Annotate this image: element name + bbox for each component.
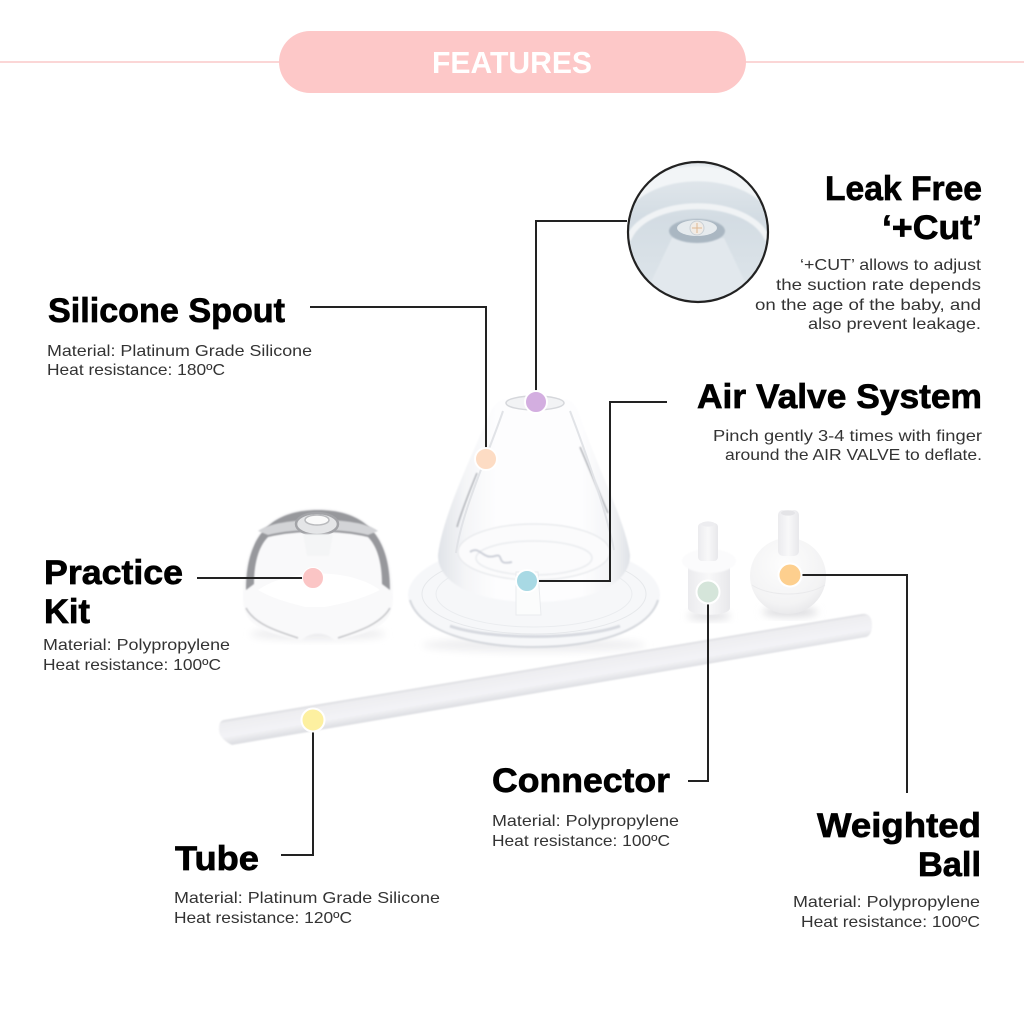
label: connector: Heat resistance: 100ºC [492,833,670,850]
label: leak free +cut: ‘+CUT’ allows to adjust [800,257,982,274]
label: leak free +cut: the suction rate depends [776,277,981,294]
label: air valve system: Pinch gently 3-4 times with finger [713,428,983,445]
marker: air valve [516,570,538,592]
label: weighted ball: Heat resistance: 100ºC [801,914,980,931]
inset: +cut close-up lens [625,162,772,305]
label: weighted ball: Weighted [817,807,981,845]
callout lines [197,221,907,855]
product: connector [682,521,736,620]
label: leak free +cut: Leak Free [825,170,982,208]
label: leak free +cut: on the age of the baby, and [755,297,981,314]
label: silicone spout: Material: Platinum Grade Silicone [47,343,312,360]
marker: practice kit [302,568,324,588]
label: connector: Material: Polypropylene [492,813,679,830]
label: practice kit: Material: Polypropylene [43,637,230,654]
title banner: FEATURES [432,45,592,80]
label: connector [492,762,679,850]
marker: tube [302,708,324,732]
product: weighted ball [750,510,826,617]
label: weighted ball: Material: Polypropylene [793,894,980,911]
label: silicone spout: Silicone Spout [48,292,285,330]
label: tube [174,840,440,927]
label: silicone spout [47,292,312,379]
label: air valve system [697,378,983,464]
label: practice kit [43,554,230,674]
label: weighted ball [793,807,981,931]
label: leak free +cut: also prevent leakage. [808,316,981,333]
label: tube: Heat resistance: 120ºC [174,910,352,927]
label: weighted ball: Ball [918,846,981,884]
marker: silicone spout [475,448,497,470]
product: silicone spout [408,396,660,652]
label: air valve system: around the AIR VALVE to deflate. [725,447,982,464]
header rule [0,61,1024,63]
label: leak free +cut: ‘+Cut’ [882,209,982,247]
marker: weighted ball [778,564,802,586]
label: leak free +cut [755,170,982,333]
label: connector: Connector [492,762,670,800]
label: silicone spout: Heat resistance: 180ºC [47,362,225,379]
label: practice kit: Kit [44,593,90,631]
label: practice kit: Practice [44,554,183,592]
label: air valve system: Air Valve System [697,378,982,416]
label: tube: Material: Platinum Grade Silicone [174,890,440,907]
marker: leak free [525,391,547,413]
marker: connector [696,580,720,604]
label: practice kit: Heat resistance: 100ºC [43,657,221,674]
product: tube [219,614,872,745]
product: practice kit cup [243,508,393,641]
label: tube: Tube [175,840,259,878]
title banner [279,31,746,93]
